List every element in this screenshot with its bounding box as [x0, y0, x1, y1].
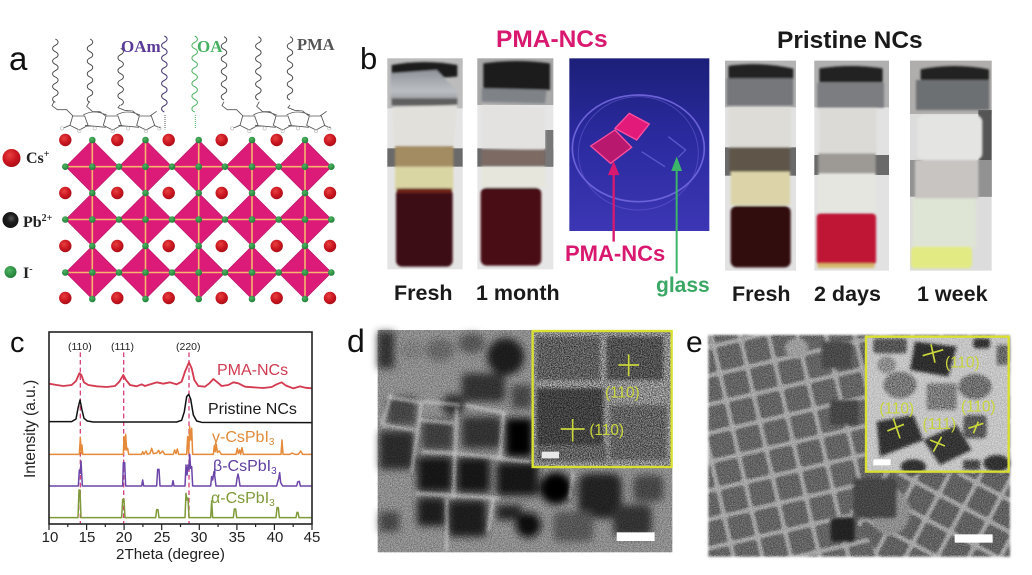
photo: PMA-NCs 1 month vial	[477, 58, 553, 269]
y axis title: Intensity (a.u.)	[22, 380, 39, 478]
OAm chain	[162, 36, 167, 129]
peak label 220: (220)	[176, 341, 201, 353]
PMA backbone left	[52, 102, 161, 133]
pink arrow	[610, 164, 618, 242]
photo: UV lit substrates	[569, 58, 709, 273]
panel a: ligand molecules	[52, 37, 331, 133]
panel label e: e	[686, 326, 703, 359]
x ticks	[49, 524, 312, 530]
legend: Cs ion: +	[44, 149, 50, 160]
plane label left: (110)	[879, 400, 914, 417]
label PMA: PMA	[297, 35, 335, 54]
label OA: OA	[197, 37, 223, 56]
legend: Cs ion	[2, 149, 50, 167]
bare glass outline	[642, 137, 686, 167]
vial caption 1 week: 1 week	[917, 282, 988, 306]
alkyl chains	[53, 37, 293, 105]
XRD chart	[22, 332, 320, 563]
lattice marks	[887, 344, 983, 452]
TEM image e	[708, 335, 1010, 557]
green arrow	[673, 159, 681, 273]
photo: pristine 1 week vial	[910, 61, 992, 271]
trace beta	[49, 454, 312, 486]
x tick labels: 15	[79, 529, 95, 546]
vial caption 1 month: 1 month	[476, 281, 560, 305]
plane label bottom: (110)	[589, 422, 624, 439]
x tick labels: 10	[42, 529, 58, 546]
series label alpha: α-CsPbI	[211, 490, 269, 507]
peak label 111: (111)	[111, 341, 134, 353]
inset d	[533, 331, 672, 467]
trace pristine NCs	[49, 394, 312, 423]
legend: I ion: I	[23, 265, 29, 282]
plane label right: (110)	[961, 399, 996, 416]
x tick labels: 40	[267, 529, 283, 546]
vial caption Fresh: Fresh	[732, 282, 791, 306]
label PMA-NCs on UV photo: PMA-NCs	[565, 241, 665, 266]
x tick labels: 20	[116, 529, 132, 546]
plane label middle: (111)	[923, 416, 956, 433]
series label gamma: γ-CsPbI	[212, 429, 269, 446]
series label pristine: Pristine NCs	[208, 401, 297, 418]
panel label b: b	[360, 41, 377, 76]
lattice marks	[561, 354, 639, 442]
label glass: glass	[656, 274, 710, 297]
x tick labels	[42, 529, 320, 546]
scale bar	[617, 532, 655, 541]
series label PMA-NCs: PMA-NCs	[217, 362, 288, 379]
legend: Cs ion: Cs	[26, 150, 44, 167]
plane label top: (110)	[945, 355, 980, 372]
inset e	[866, 337, 1010, 474]
panel label a: a	[9, 40, 28, 77]
PMA-NCs coated glass slides	[591, 113, 649, 163]
legend: I ion	[4, 264, 33, 282]
legend: Pb ion: Pb	[23, 214, 42, 231]
axes frame	[49, 332, 312, 524]
OA chain	[192, 36, 197, 128]
series label gamma: 3	[269, 437, 275, 448]
scale bar	[955, 534, 993, 543]
vial caption 2 days: 2 days	[814, 282, 881, 306]
inset scale bar	[873, 459, 891, 465]
plot traces	[49, 352, 312, 523]
x tick labels: 35	[229, 529, 245, 546]
inset scale bar	[542, 452, 559, 458]
TEM image d	[378, 330, 672, 552]
cell boundaries	[382, 393, 573, 552]
x tick labels: 30	[191, 529, 207, 546]
trace alpha	[49, 490, 312, 518]
legend: I ion: -	[29, 264, 33, 275]
series label alpha: 3	[269, 498, 275, 509]
heading PMA-NCs: PMA-NCs	[496, 26, 608, 53]
photo: PMA-NCs fresh vial	[387, 58, 463, 269]
plane label top: (110)	[605, 385, 640, 402]
legend: Pb ion: 2+	[42, 213, 53, 224]
series label beta: β-CsPbI	[213, 458, 271, 475]
panel label c: c	[10, 327, 24, 359]
series label beta: 3	[271, 466, 277, 477]
legend: Pb ion	[2, 212, 53, 231]
peak label 110: (110)	[68, 341, 92, 353]
photo: pristine fresh vial	[725, 61, 796, 271]
x axis title: 2Theta (degree)	[116, 546, 225, 563]
trace gamma	[49, 427, 312, 454]
photo: pristine 2 days vial	[814, 61, 889, 271]
PMA backbone right	[222, 102, 331, 133]
x tick labels: 45	[304, 529, 320, 546]
vial caption Fresh: Fresh	[394, 281, 453, 305]
x tick labels: 25	[154, 529, 170, 546]
trace PMA-NCs	[49, 362, 312, 388]
panel label d: d	[347, 323, 365, 359]
label OAm: OAm	[121, 37, 161, 56]
peak guide lines	[80, 352, 189, 523]
heading Pristine NCs: Pristine NCs	[777, 27, 923, 54]
perovskite lattice	[59, 134, 336, 304]
petri dish	[572, 95, 704, 210]
